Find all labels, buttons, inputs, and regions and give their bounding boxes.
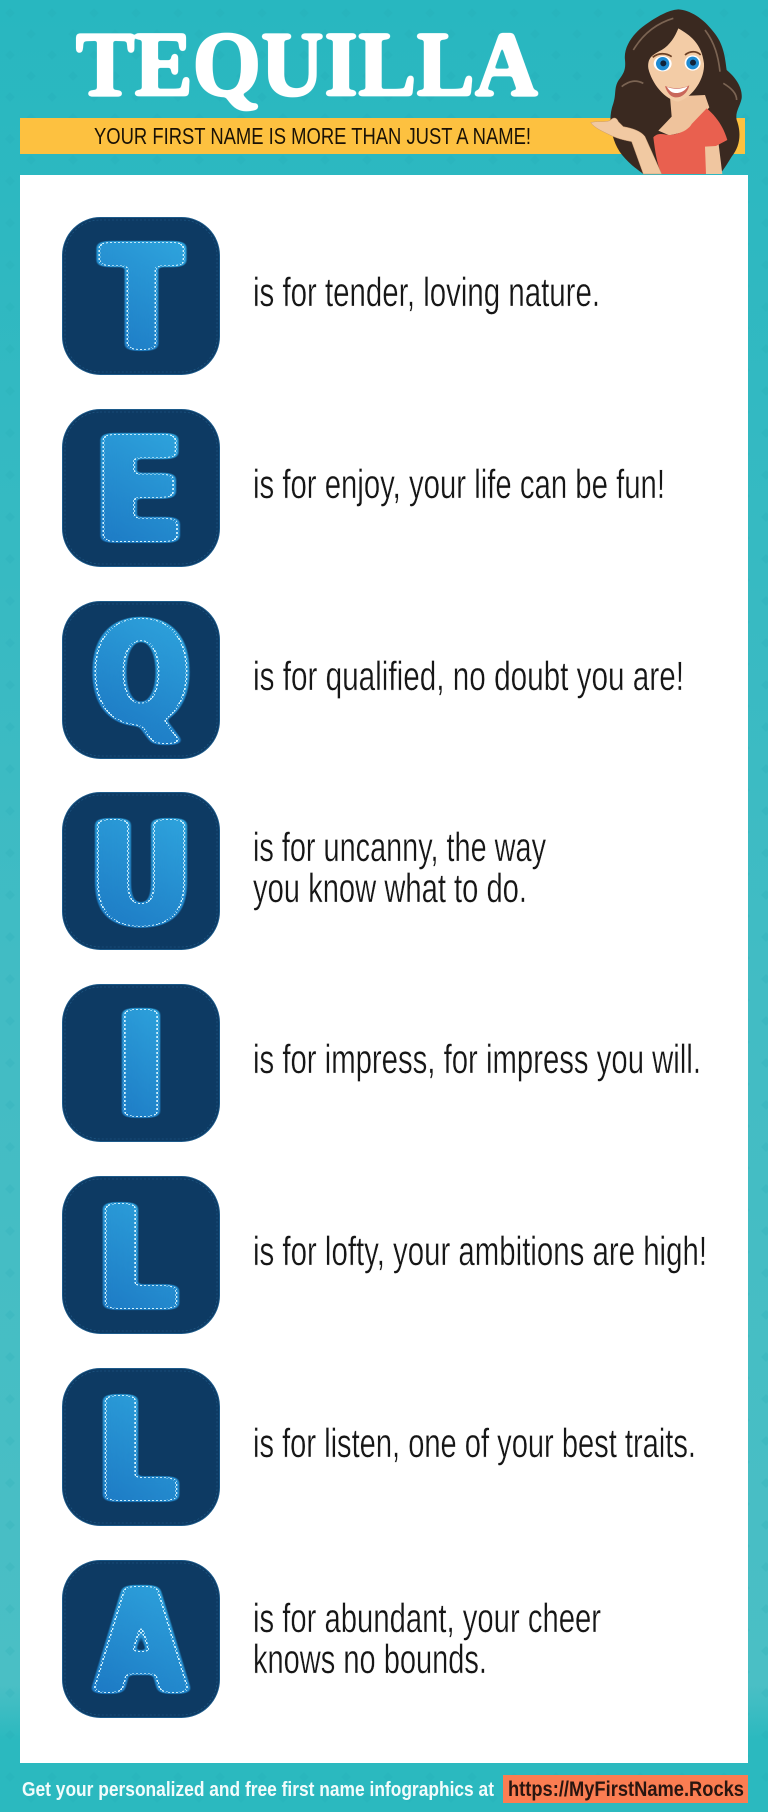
letter tile T <box>62 215 220 382</box>
subtitle banner <box>20 118 745 154</box>
title: TEQUILLA <box>76 13 538 115</box>
text block A: is for abundant, your cheer <box>253 1595 601 1641</box>
letter tile Q: Q <box>93 594 189 755</box>
text block A: knows no bounds. <box>253 1636 487 1682</box>
letter tile A <box>62 1560 220 1725</box>
footer text: Get your personalized and free first name infographics at <box>22 1779 494 1801</box>
row T <box>62 215 600 382</box>
row E <box>62 408 665 574</box>
text line T: is for tender, loving nature. <box>253 269 600 315</box>
letter tile E <box>62 408 220 574</box>
row L <box>62 1176 707 1341</box>
row Q <box>62 594 684 758</box>
letter tile L second: L <box>97 1370 177 1533</box>
letter tile I: I <box>115 984 167 1149</box>
subtitle banner: YOUR FIRST NAME IS MORE THAN JUST A NAME! <box>94 123 531 149</box>
letter tile L second <box>62 1368 220 1533</box>
letter tile I <box>62 984 220 1149</box>
letter tile T: T <box>102 215 181 382</box>
letter tile U <box>62 792 220 956</box>
letter tile U: U <box>89 793 193 956</box>
text block U: you know what to do. <box>253 865 527 911</box>
text block U <box>253 824 546 911</box>
row I <box>62 984 701 1149</box>
letter tile E: E <box>95 408 183 574</box>
row A <box>62 1560 601 1725</box>
text block U: is for uncanny, the way <box>253 824 546 870</box>
letter tile A: A <box>96 1560 186 1725</box>
row U <box>62 792 546 956</box>
text block A <box>253 1595 601 1682</box>
letter tile Q <box>62 594 220 758</box>
row L second <box>62 1368 696 1533</box>
icon: cartoon woman <box>591 9 742 174</box>
letter tile L: L <box>97 1178 177 1341</box>
letter tile L <box>62 1176 220 1341</box>
